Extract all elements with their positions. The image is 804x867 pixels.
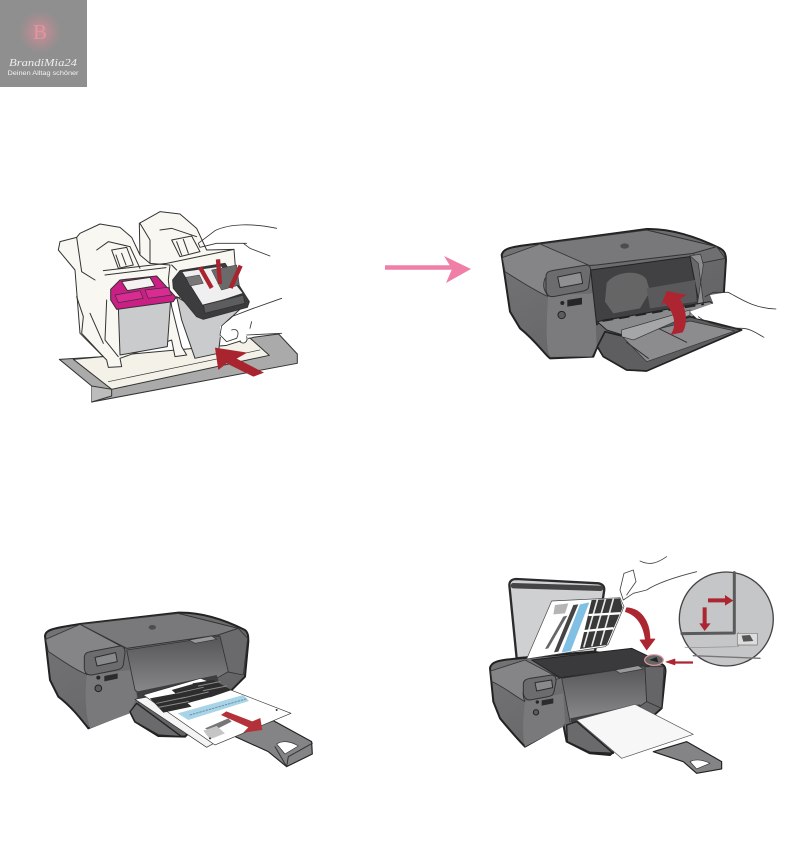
right shoulder <box>693 247 725 263</box>
inset corner detail <box>679 572 773 666</box>
watermark logo <box>0 0 87 87</box>
illustration: closing the print cartridge door <box>502 229 777 371</box>
upper hand <box>198 225 277 256</box>
paper slot <box>570 704 643 727</box>
paper handle <box>189 636 217 643</box>
hand on door <box>690 292 777 338</box>
front sheet <box>143 678 291 745</box>
memory card slot and power button <box>558 298 582 319</box>
inset down arrow <box>699 607 711 631</box>
blank paper on tray <box>577 704 693 758</box>
hand pushing cartridge <box>220 298 282 343</box>
alignment sheet held over glass <box>527 598 624 659</box>
output tray <box>130 703 182 737</box>
front left <box>523 693 565 747</box>
front left panel <box>86 670 137 728</box>
printer body <box>502 229 726 358</box>
printer body <box>45 613 248 737</box>
output tray <box>567 722 613 753</box>
printer body <box>490 652 665 755</box>
inner bright zone <box>647 280 697 308</box>
hp logo <box>620 243 629 249</box>
scanner lid <box>540 230 717 266</box>
paper slot <box>137 675 221 703</box>
illustration: loading alignment page on scanner glass <box>490 557 773 773</box>
red curved arrow <box>661 291 687 335</box>
slot and button <box>533 698 553 715</box>
output tray <box>597 317 742 371</box>
carriage latches and frame <box>58 212 237 367</box>
pink arrow between steps <box>385 256 471 283</box>
watermark logo: B <box>33 20 47 44</box>
inset right arrow <box>708 595 733 606</box>
control display <box>546 265 591 297</box>
open cartridge bay <box>591 257 703 325</box>
red arrow to marker <box>666 659 693 665</box>
illustration: alignment page printed <box>45 613 312 767</box>
scanner lid <box>80 613 238 648</box>
right side <box>645 667 664 708</box>
left shoulder <box>46 624 125 675</box>
circled corner marker <box>645 655 663 665</box>
left shoulder panel <box>502 244 588 297</box>
front left panel <box>547 293 597 357</box>
black cartridge <box>173 263 249 358</box>
colour cartridge <box>111 276 176 355</box>
hp logo <box>149 625 156 630</box>
handle <box>615 666 643 673</box>
right side panel <box>218 628 248 675</box>
hand holding sheet <box>620 557 697 600</box>
left shoulder <box>491 660 560 702</box>
red push arrow <box>215 348 264 377</box>
control display <box>84 646 125 675</box>
door inner panel <box>622 310 690 340</box>
tray extender <box>232 721 312 767</box>
carriage inside <box>605 273 650 313</box>
back sheet <box>135 687 265 747</box>
carriage base tray <box>59 334 297 402</box>
illustration: inserting print cartridge into carriage <box>58 212 297 402</box>
front door <box>562 666 647 722</box>
scanner glass bed <box>532 648 660 678</box>
red curved arrow down <box>625 608 655 650</box>
front door <box>127 636 228 695</box>
slot and power button <box>95 673 118 692</box>
red output arrow <box>221 711 262 733</box>
tray extender <box>653 742 722 773</box>
watermark logo: BrandiMia24 <box>9 57 78 69</box>
red motion marks <box>200 259 241 288</box>
control display <box>523 675 556 700</box>
open scanner lid <box>509 579 604 658</box>
right side pillar <box>690 254 703 305</box>
door flap lifted <box>597 302 714 338</box>
watermark logo: Deinen Alltag schöner <box>8 70 79 77</box>
